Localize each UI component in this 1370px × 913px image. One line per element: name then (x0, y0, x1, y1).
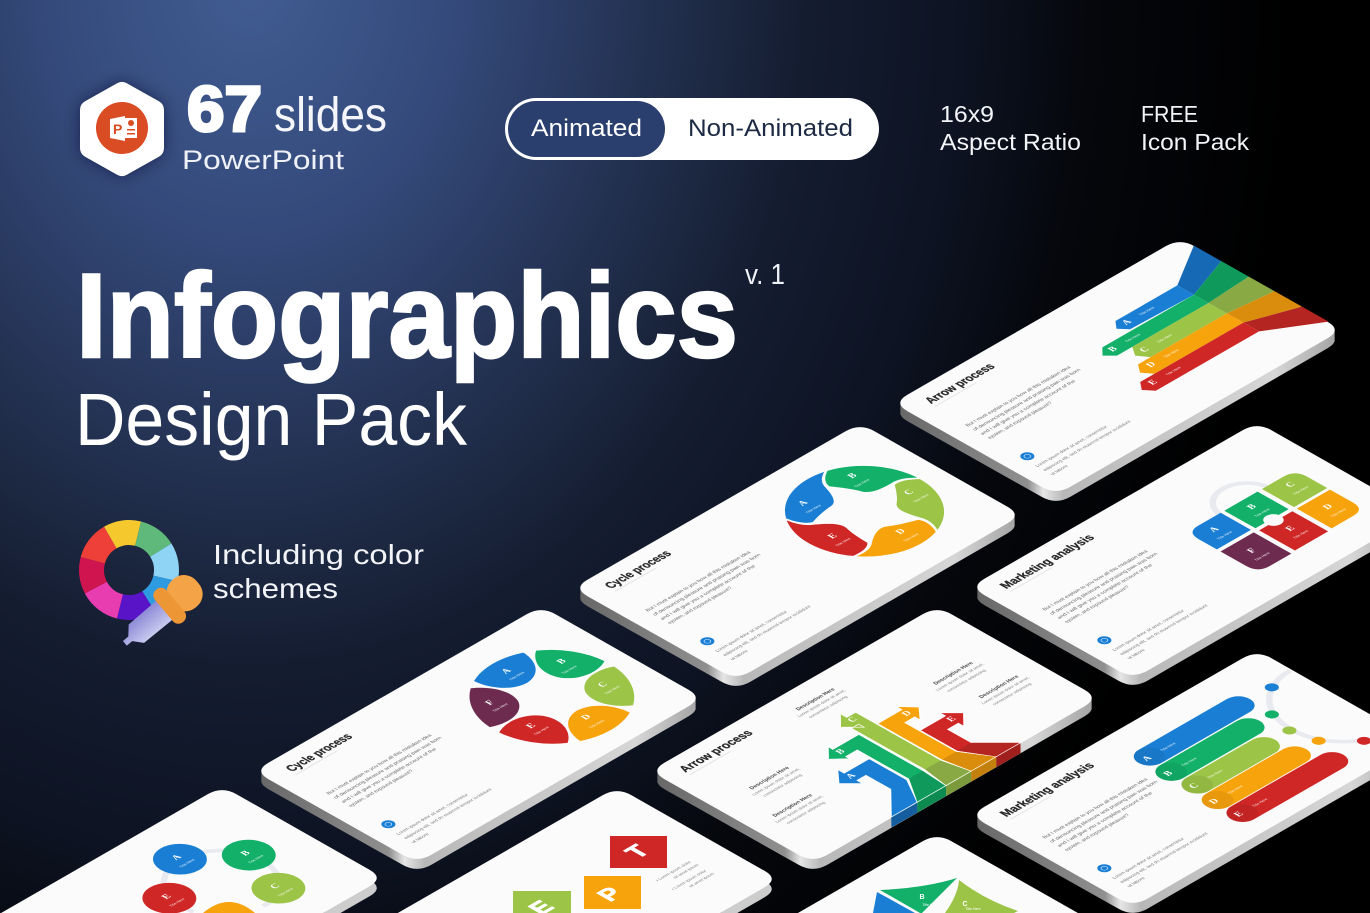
panel: slide Marketing analysis lock: Title Here (1330, 508, 1347, 518)
panel: slide Marketing analysis pills: C (1187, 782, 1202, 790)
panel: slide Arrow process bent arrows: Description Here (978, 675, 1021, 699)
panel: slide Marketing analysis pills: of denouncing pleasure and praising pain was born (1049, 780, 1160, 844)
panel: slide Marketing analysis lock: Title Here (1254, 552, 1271, 562)
panel: slide Arrow process top right: and I will give you a complete account of the (979, 379, 1078, 436)
panel: slide Arrow process bent arrows: consectetur adipiscing (785, 800, 827, 825)
panel: slide Arrow process top right: Title Here (1156, 334, 1173, 344)
panel: slide Arrow process top right (900, 242, 1335, 501)
panel: slide Cycle process star ring: Title Here (913, 493, 930, 503)
panel: slide Cycle process star ring: system, and expound pleasure? (666, 586, 734, 625)
panel: slide Marketing analysis lock: Title Here (1292, 530, 1310, 539)
panel: slide EPT blocks bottom center: sit amet ipsum (687, 872, 716, 888)
text: aspect ratio (940, 101, 1081, 155)
panel: slide Marketing analysis pills: E (1232, 811, 1246, 819)
panel: slide Cycle process petals: Title Here (533, 726, 550, 736)
panel: slide EPT blocks bottom center (398, 791, 772, 913)
panel: slide Marketing analysis pills: ut labore (1126, 876, 1147, 888)
panel: slide Cycle process star ring: and I will give you a complete account of the (659, 564, 758, 621)
panel: slide Cycle process petals: B (555, 658, 569, 666)
panel: slide Marketing analysis lock: Lorem ipsum dolor sit amet, consectetur (1111, 609, 1186, 652)
panel: slide Cycle process petals: Title Here (508, 671, 526, 681)
toggle: Animated / Non-Animated: Non-Animated (688, 115, 853, 142)
panel: slide circles bottom left: C (268, 882, 283, 891)
panel: slide Arrow process top right: adipiscing elit, sed do eiusmod tempor incididunt (1041, 419, 1132, 472)
title: Infographics: Infographics (76, 249, 738, 383)
panel: slide Cycle process star ring: C (902, 488, 917, 497)
panel: slide Cycle process petals: adipiscing elit, sed do eiusmod tempor incididunt (402, 787, 493, 840)
panel: slide Cycle process petals: E (524, 722, 539, 730)
panel: slide Arrow process bent arrows: E (945, 715, 959, 724)
icon: color wheel with dropper (79, 520, 211, 659)
panel: slide Arrow process top right: Arrow process (921, 361, 998, 406)
panel: slide triangles bottom right: B (919, 894, 925, 901)
panel: slide Cycle process petals: D (579, 713, 594, 722)
panel: slide Arrow process bent arrows: Lorem ipsum dolor sit amet, (796, 689, 847, 718)
panel: slide Marketing analysis pills (977, 654, 1370, 913)
panel: slide Marketing analysis pills: system, and expound pleasure? (1063, 813, 1131, 852)
panel: slide Cycle process star ring: of denouncing pleasure and praising pain was born (652, 553, 763, 617)
panel: slide Arrow process bent arrows: consectetur adipiscing (762, 773, 804, 797)
panel: slide Cycle process petals (261, 610, 696, 869)
panel: slide Arrow process top right: system, and expound pleasure? (986, 401, 1054, 440)
toggle: Animated / Non-Animated: Animated (531, 115, 642, 142)
panel: slide EPT blocks bottom center: • Lorem ipsum dolor (654, 860, 693, 882)
panel: slide Marketing analysis lock: Title Here (1292, 486, 1310, 496)
panel: slide Arrow process top right: of denouncing pleasure and praising pain was born (972, 368, 1083, 432)
panel: slide circles bottom left: Title Here (168, 898, 186, 908)
panel: slide Arrow process bent arrows: Lorem ipsum dolor sit amet, (750, 767, 801, 796)
panel: slide Marketing analysis pills: and I will give you a complete account of the (1056, 791, 1155, 848)
text: free icon pack: Icon Pack (1141, 129, 1250, 155)
panel: slide EPT blocks bottom center: P (592, 884, 629, 905)
heading: 67 slides: slides (274, 89, 387, 142)
panel: slide Arrow process top right: D (1144, 361, 1159, 369)
panel: slide Cycle process star ring: Title Here (903, 533, 920, 543)
panel: slide Marketing analysis pills: Marketing analysis (997, 761, 1098, 819)
panel: slide Marketing analysis lock: F (1245, 547, 1259, 555)
panel: slide Arrow process bent arrows: Lorem ipsum dolor sit amet, (980, 676, 1031, 705)
heading: 67 slides (187, 73, 387, 145)
panel: slide Arrow process bent arrows: Description Here (932, 661, 975, 686)
panel: slide Marketing analysis pills: But I must explain to you how all this mistaken idea (1041, 777, 1150, 840)
panel: slide Arrow process bent arrows: C (846, 716, 861, 724)
panel: slide Marketing analysis lock: E (1284, 525, 1298, 533)
panel: slide Marketing analysis lock (977, 426, 1370, 685)
panel: slide EPT blocks bottom center: T (619, 841, 656, 862)
panel: slide Arrow process top right: B (1106, 345, 1120, 353)
panel: slide Cycle process star ring: Title Here (805, 504, 822, 514)
panel: slide Marketing analysis lock: D (1321, 503, 1336, 511)
panel: slide Cycle process petals: of denouncing pleasure and praising pain was born (333, 736, 444, 800)
panel: slide Marketing analysis lock: B (1245, 503, 1259, 511)
panel: slide Arrow process top right: ut labore (1049, 464, 1070, 476)
panel: slide Cycle process petals: system, and expound pleasure? (347, 769, 415, 808)
subtitle: Design Pack: Design Pack (75, 378, 468, 461)
panel: slide Cycle process petals: A (500, 667, 514, 676)
panel: slide Marketing analysis lock: Title Here (1254, 508, 1271, 518)
panel: slide Arrow process top right: E (1146, 379, 1160, 387)
panel: slide Cycle process petals: Title Here (588, 719, 606, 729)
panel: slide Arrow process bent arrows: Arrow process (676, 728, 756, 774)
panel: slide Marketing analysis pills: Title Here (1251, 798, 1269, 808)
panel: slide triangles bottom right: C (962, 901, 968, 908)
text: aspect ratio: 16x9 (940, 101, 994, 127)
panel: slide Cycle process star ring (580, 427, 1015, 686)
panel: slide Marketing analysis pills: Title Here (1181, 757, 1198, 767)
panel: slide Arrow process bent arrows: Description Here (772, 793, 815, 818)
heading: 67 slides: 67 (187, 73, 262, 145)
panel: slide Cycle process petals: Title Here (492, 703, 509, 713)
panel: slide Arrow process bent arrows: B (834, 748, 848, 756)
panel: slide Marketing analysis pills: Title Here (1227, 785, 1244, 795)
icon: PowerPoint hexagon: P (113, 121, 122, 137)
panel: slide Cycle process star ring: D (894, 528, 909, 536)
panel: slide Cycle process petals: F (483, 699, 497, 707)
panel: slide Cycle process petals: ut labore (410, 832, 431, 844)
text: PowerPoint: PowerPoint (182, 145, 345, 175)
panel: slide Arrow process bent arrows: Lorem ipsum dolor sit amet, (934, 662, 985, 692)
panel: slide Marketing analysis pills: Lorem ipsum dolor sit amet, consectetur (1111, 837, 1186, 880)
panel: slide Cycle process petals: and I will give you a complete account of the (340, 747, 439, 804)
panel: slide Cycle process star ring: adipiscing elit, sed do eiusmod tempor incididunt (721, 604, 812, 657)
text: Including color schemes (213, 539, 424, 604)
text: aspect ratio: Aspect Ratio (940, 129, 1081, 155)
panel: slide Arrow process bent arrows: consectetur adipiscing (991, 682, 1033, 706)
panel: slide Cycle process star ring: A (796, 499, 811, 508)
panel: slide Cycle process star ring: Cycle process (601, 549, 675, 591)
text: Including color schemes: schemes (213, 573, 338, 604)
panel: slide Arrow process bent arrows: consectetur adipiscing (945, 668, 987, 693)
panel: slide circles bottom left: Title Here (179, 858, 196, 868)
panel: slide circles bottom left (1, 790, 377, 913)
panel: slide Cycle process petals: C (596, 681, 611, 689)
icon: PowerPoint hexagon (90, 92, 154, 166)
text: Including color schemes: Including color (213, 539, 424, 570)
panel: slide EPT blocks bottom center: sit amet ipsum (672, 863, 700, 879)
panel: slide Arrow process top right: But I must explain to you how all this mistaken idea (964, 365, 1073, 428)
panel: slide Cycle process star ring: E (826, 532, 840, 541)
panel: slide Cycle process star ring: Title Here (853, 478, 871, 488)
text: free icon pack (1141, 101, 1250, 155)
panel: slide Cycle process star ring: ut labore (729, 649, 750, 661)
panel: slide circles bottom left: Title Here (277, 887, 294, 897)
panel: slide Arrow process top right: C (1138, 346, 1153, 354)
panel: slide Arrow process bent arrows: Description Here (748, 766, 791, 791)
panel: slide Cycle process petals: Lorem ipsum dolor sit amet, consectetur (395, 793, 470, 836)
panel: slide Arrow process top right: Title Here (1163, 349, 1180, 359)
toggle: Animated / Non-Animated (505, 98, 879, 160)
panel: slide Arrow process bent arrows: Lorem ipsum dolor sit amet, (774, 794, 824, 824)
panel: slide Cycle process star ring: But I must explain to you how all this mistaken idea (644, 550, 753, 613)
panel: slide Marketing analysis lock: A (1207, 526, 1222, 534)
panel: slide Marketing analysis lock: ut labore (1126, 648, 1147, 660)
panel: slide Marketing analysis lock: Title Here (1216, 531, 1233, 540)
panel: slide Marketing analysis lock: system, and expound pleasure? (1063, 585, 1131, 624)
panel: slide Marketing analysis lock: Marketing analysis (997, 533, 1098, 591)
text: free icon pack: FREE (1141, 101, 1198, 127)
panel: slide circles bottom left: A (170, 853, 185, 862)
panel: slide Cycle process petals: But I must explain to you how all this mistaken idea (325, 733, 434, 796)
panel: slide circles bottom left: E (160, 893, 174, 901)
panel: slide Arrow process bent arrows: D (900, 710, 915, 718)
panel: slide Arrow process top right: A (1120, 318, 1135, 327)
panel: slide Marketing analysis lock: and I will give you a complete account of the (1056, 563, 1155, 620)
panel: slide triangles bottom right: Title Here (922, 903, 938, 907)
panel: slide Cycle process star ring: B (846, 472, 860, 480)
panel: slide Arrow process bent arrows (657, 610, 1092, 869)
panel: slide Marketing analysis lock: of denouncing pleasure and praising pain was born (1049, 552, 1160, 616)
panel: slide circles bottom left: Title Here (247, 854, 265, 864)
panel: slide triangles bottom right (798, 837, 1078, 913)
panel: slide Marketing analysis pills: B (1162, 770, 1176, 778)
panel: slide Marketing analysis pills: Title Here (1160, 742, 1177, 752)
panel: slide Arrow process top right: Title Here (1165, 366, 1182, 376)
panel: slide triangles bottom right: Title Here (965, 907, 981, 911)
panel: slide Marketing analysis pills: adipiscing elit, sed do eiusmod tempor incididunt (1118, 831, 1209, 884)
panel: slide Arrow process bent arrows: Description Here (795, 688, 837, 712)
panel: slide Arrow process bent arrows: consectetur adipiscing (807, 695, 849, 719)
panel: slide Marketing analysis lock: C (1284, 481, 1298, 489)
panel: slide Marketing analysis pills: D (1207, 797, 1222, 806)
panel: slide EPT blocks bottom center: • Lorem ipsum dolor (670, 869, 708, 891)
panel: slide circles bottom left: B (239, 850, 253, 858)
panel: slide Arrow process top right: Title Here (1124, 333, 1142, 343)
panel: slide Marketing analysis lock: adipiscing elit, sed do eiusmod tempor incididunt (1118, 603, 1209, 656)
panel: slide Cycle process star ring: Lorem ipsum dolor sit amet, consectetur (714, 610, 789, 653)
panel: slide Marketing analysis pills: A (1140, 755, 1155, 763)
panel: slide Cycle process petals: Title Here (561, 665, 578, 675)
panel: slide Arrow process top right: Title Here (1138, 306, 1156, 316)
panel: slide Cycle process petals: Title Here (604, 685, 621, 695)
panel: slide Cycle process petals: Cycle process (282, 732, 356, 774)
version label: v. 1 (745, 259, 785, 291)
panel: slide Marketing analysis pills: Title Here (1206, 769, 1224, 779)
panel: slide Arrow process bent arrows: A (844, 772, 859, 780)
panel: slide Marketing analysis lock: But I must explain to you how all this mistaken idea (1041, 549, 1150, 612)
panel: slide Cycle process star ring: Title Here (835, 537, 852, 547)
panel: slide Arrow process top right: Lorem ipsum dolor sit amet, consectetur (1034, 425, 1109, 468)
